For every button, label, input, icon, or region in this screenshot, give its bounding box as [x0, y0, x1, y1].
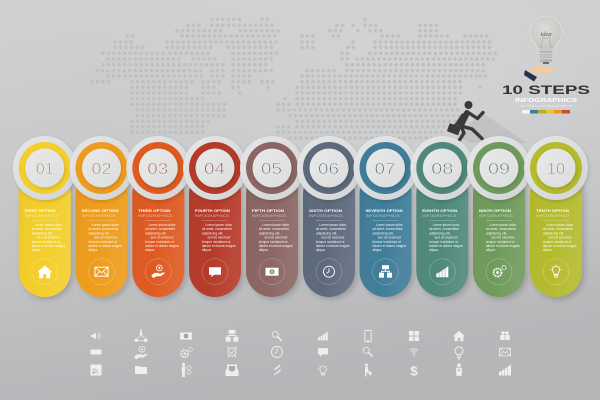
subheading: INFOGRAPHICS [515, 98, 578, 104]
step 08: sit amet, consectetur [429, 227, 460, 231]
step 08: labore et dolore magna [429, 244, 463, 248]
step 10: TENTH OPTION [536, 208, 569, 213]
step 01: tempor incididunt ut [32, 240, 60, 244]
icon: gears [181, 348, 192, 357]
icon: magnifier [272, 331, 282, 341]
icon: speaker [91, 332, 100, 340]
step 10: aliqua. [543, 248, 553, 252]
step 09: sit amet, consectetur [486, 227, 517, 231]
step 02 [70, 136, 134, 297]
icon: seated person [365, 364, 372, 376]
step 08: aliqua. [429, 248, 439, 252]
step 08 [410, 136, 474, 297]
step 05: labore et dolore magna [259, 244, 293, 248]
step 02: sit amet, consectetur [88, 227, 119, 231]
icon: folder [135, 366, 147, 374]
step 09: Lorem ipsum dolor [489, 223, 517, 227]
icon: rss [90, 364, 102, 376]
step 09: NINTH OPTION [479, 208, 511, 213]
icon: bolt [274, 364, 280, 376]
step 01 [13, 136, 77, 297]
step 03 [126, 136, 190, 297]
step 03: tempor incididunt ut [145, 240, 174, 244]
icon: house [453, 331, 465, 341]
icon: person with gears [182, 363, 191, 377]
step 09: sed do eiusmod [491, 236, 514, 240]
step 08: INFOGRAPHICS [422, 214, 456, 218]
step 04: tempor incididunt ut [202, 240, 230, 244]
icon: alarm clock [227, 347, 237, 358]
step 06 [297, 136, 361, 297]
icon: battery [90, 350, 102, 354]
icon: bulb [318, 364, 328, 376]
icon: grid [409, 331, 419, 341]
step 01: FIRST OPTION [25, 208, 56, 213]
step 04: Lorem ipsum dolor [205, 223, 233, 227]
step 07: aliqua. [372, 248, 382, 252]
step 10: sed do eiusmod [548, 236, 571, 240]
step 03: labore et dolore magna [145, 244, 179, 248]
step 07: adipisicing elit, [372, 231, 394, 235]
step 06: aliqua. [316, 248, 326, 252]
colour key bar [522, 110, 570, 114]
step 04: labore et dolore magna [202, 244, 236, 248]
step 02: labore et dolore magna [88, 244, 122, 248]
icon: hand with coin [134, 346, 148, 360]
step 08: 08 [431, 161, 453, 178]
step 02: sed do eiusmod [94, 236, 117, 240]
step 09: INFOGRAPHICS [479, 214, 513, 218]
step 03: THIRD OPTION [138, 208, 171, 213]
step 10: adipisicing elit, [543, 231, 564, 235]
step 07: labore et dolore magna [372, 244, 406, 248]
heading: 10 steps: 10 STEPS [502, 85, 591, 97]
step 09 [467, 136, 531, 297]
step 03: aliqua. [145, 248, 155, 252]
step 05: Lorem ipsum dolor [262, 223, 290, 227]
step 09: 09 [488, 161, 510, 178]
icon: network [135, 329, 147, 342]
step 07 [354, 136, 418, 297]
step 06: SIXTH OPTION [309, 208, 342, 213]
step 03: adipisicing elit, [145, 231, 167, 235]
step 03: 03 [147, 161, 168, 178]
step 09: aliqua. [486, 248, 496, 252]
step 04: sed do eiusmod [207, 236, 230, 240]
icon: clock [272, 346, 282, 358]
step 05: sed do eiusmod [264, 236, 287, 240]
step 05: INFOGRAPHICS [252, 214, 286, 218]
step 06: tempor incididunt ut [316, 240, 344, 244]
step 06: labore et dolore magna [316, 244, 350, 248]
dollar sign: $ [410, 364, 418, 378]
step 03: Lorem ipsum dolor [149, 223, 176, 227]
step 03: INFOGRAPHICS [138, 214, 172, 218]
step 10: Lorem ipsum dolor [546, 223, 574, 227]
step 09: labore et dolore magna [486, 244, 520, 248]
step 08: adipisicing elit, [429, 231, 451, 235]
step 09: adipisicing elit, [486, 231, 507, 235]
icon: envelope [499, 348, 511, 356]
step 01: aliqua. [32, 248, 41, 252]
step 05: FIFTH OPTION [252, 208, 284, 213]
step 02: 02 [92, 161, 112, 178]
step 10: sit amet, consectetur [543, 227, 574, 231]
step 08: EIGHTH OPTION [422, 208, 458, 213]
icon: rising bars [499, 364, 511, 376]
step 01: INFOGRAPHICS [25, 214, 59, 218]
step 06: INFOGRAPHICS [309, 214, 343, 218]
step 05 [240, 136, 304, 297]
step 06: sit amet, consectetur [316, 227, 347, 231]
step 07: sit amet, consectetur [372, 227, 403, 231]
icon: running businessman [447, 101, 483, 140]
step 02: adipisicing elit, [88, 231, 110, 235]
step 02: INFOGRAPHICS [82, 214, 116, 218]
step 01: sed do eiusmod [37, 236, 60, 240]
step 05: 05 [261, 161, 282, 178]
step 05: tempor incididunt ut [259, 240, 287, 244]
step 06: Lorem ipsum dolor [319, 223, 347, 227]
icon: person with tie [456, 363, 462, 376]
step 08: sed do eiusmod [435, 236, 458, 240]
step 01: labore et dolore magna [32, 244, 65, 248]
icon: mobile [365, 330, 371, 342]
step 02: SECOND OPTION [82, 208, 119, 213]
step 06: 06 [318, 161, 339, 178]
icon: team [500, 331, 510, 340]
step 07: INFOGRAPHICS [366, 214, 400, 218]
step 07: Lorem ipsum dolor [376, 223, 404, 227]
step 08: Lorem ipsum dolor [433, 223, 460, 227]
icon: bars [318, 332, 328, 340]
step 04: aliqua. [202, 248, 212, 252]
icon: wifi [410, 349, 418, 356]
icon: magnifier [363, 347, 373, 357]
step 07: sed do eiusmod [378, 236, 401, 240]
step 04: sit amet, consectetur [202, 227, 233, 231]
step 02: Lorem ipsum dolor [92, 223, 120, 227]
step 10: 10 [547, 161, 565, 178]
small caption: VECTOR ILLUSTRATION EPS 10 [520, 104, 573, 108]
icon: organisation chart [226, 330, 238, 342]
step 04: FOURTH OPTION [195, 208, 230, 213]
step 05: adipisicing elit, [259, 231, 280, 235]
step 01: sit amet, consectetur [32, 227, 63, 231]
step 07: SEVENTH OPTION [366, 208, 403, 213]
step 04: INFOGRAPHICS [195, 214, 229, 218]
step 01: Lorem ipsum dolor [35, 223, 63, 227]
step 03: sit amet, consectetur [145, 227, 176, 231]
step 06: sed do eiusmod [321, 236, 344, 240]
step 06: adipisicing elit, [316, 231, 337, 235]
step 10 [524, 136, 588, 297]
step 03: sed do eiusmod [151, 236, 174, 240]
bulb label: idea [540, 31, 552, 38]
icon: idea light bulb in hand [524, 16, 562, 82]
step 09: tempor incididunt ut [486, 240, 514, 244]
step 05: sit amet, consectetur [259, 227, 290, 231]
step 04 [183, 136, 247, 297]
step 01: adipisicing elit, [32, 231, 53, 235]
icon: banknote [180, 332, 192, 340]
icon: speech bubble [318, 348, 328, 357]
dotted world map [92, 19, 497, 138]
step 10: INFOGRAPHICS [536, 214, 570, 218]
step 01: 01 [36, 161, 54, 178]
step 02: tempor incididunt ut [88, 240, 117, 244]
step 10: labore et dolore magna [543, 244, 577, 248]
step 04: adipisicing elit, [202, 231, 223, 235]
step 05: aliqua. [259, 248, 269, 252]
step 10: tempor incididunt ut [543, 240, 571, 244]
step 07: tempor incididunt ut [372, 240, 401, 244]
step 04: 04 [204, 161, 225, 178]
step 07: 07 [374, 161, 396, 178]
step 02: aliqua. [88, 248, 98, 252]
icon: location pin [455, 347, 463, 359]
icon set [90, 329, 511, 378]
runner shadow [456, 113, 527, 143]
icon: inbox [226, 364, 238, 376]
step 08: tempor incididunt ut [429, 240, 458, 244]
